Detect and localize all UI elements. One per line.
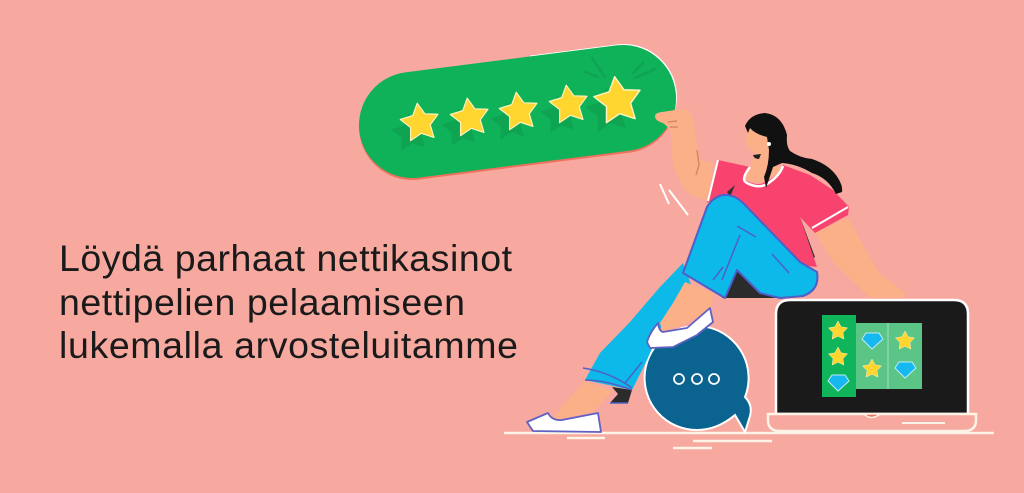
- jeans creases: [713, 226, 789, 280]
- yellow stars: [398, 73, 644, 142]
- right arm and hand on laptop: [815, 218, 905, 298]
- heading text: [59, 237, 518, 366]
- raised shoe: [647, 308, 713, 348]
- jeans cuff and shadow: [610, 387, 632, 403]
- banner scene: [62, 44, 994, 450]
- neck and face: [743, 125, 784, 182]
- slot stars: [828, 321, 914, 377]
- mouth: [753, 154, 761, 159]
- laptop: [768, 300, 976, 431]
- slot reels: [856, 323, 922, 389]
- lower blue jeans leg: [585, 263, 695, 390]
- shirt trim and collar: [708, 160, 848, 228]
- shadow under knee: [722, 268, 780, 298]
- heading text: Löydä parhaat nettikasinot: [59, 237, 513, 279]
- woman: [527, 109, 905, 432]
- ground lines: [504, 433, 994, 448]
- laptop screen: [776, 300, 968, 414]
- slot diamonds: [828, 333, 916, 391]
- pink t-shirt: [707, 160, 849, 267]
- heading text: lukemalla arvosteluitamme: [59, 324, 518, 366]
- motion lines: [660, 184, 688, 215]
- raised blue jeans leg: [683, 195, 817, 298]
- lower shoe: [527, 413, 601, 432]
- green rating pill with five stars: [389, 58, 655, 152]
- heading text: nettipelien pelaamiseen: [59, 281, 465, 323]
- earring: [767, 142, 771, 146]
- dark shadow behind torso: [795, 217, 815, 262]
- raised arm pointing at pill: [655, 109, 713, 200]
- speech bubble: [645, 326, 751, 432]
- raised foot: [660, 282, 713, 332]
- star shadows: [389, 84, 634, 152]
- laptop base: [768, 414, 976, 431]
- lower leg foot: [553, 381, 613, 420]
- hair: [745, 113, 842, 194]
- spark lines above the big star: [585, 58, 655, 78]
